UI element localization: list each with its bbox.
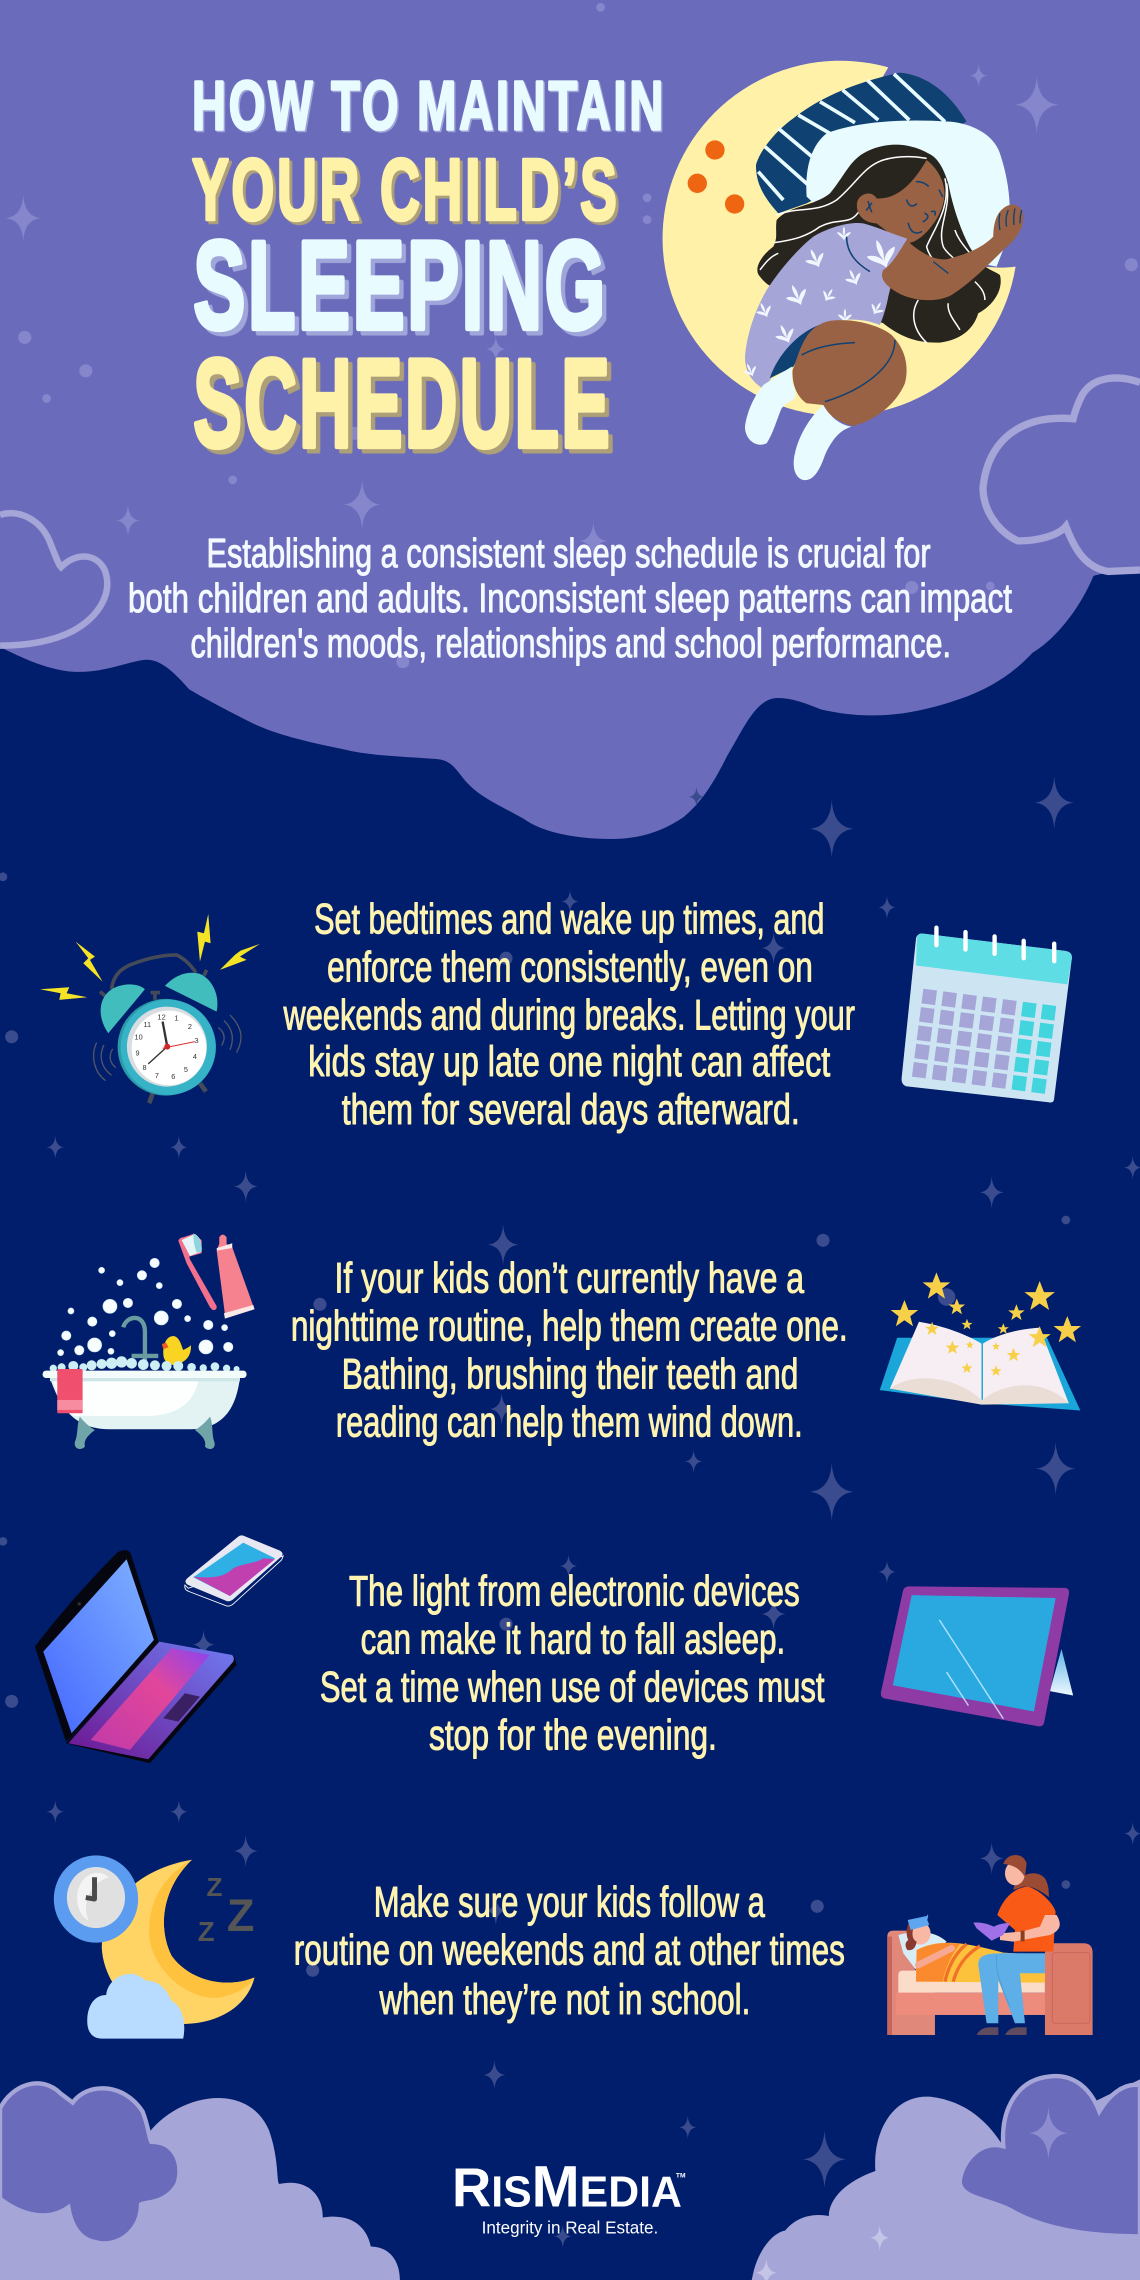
- clock hands: [163, 1022, 167, 1047]
- toothbrush: [178, 1234, 217, 1310]
- clock numerals: 7: [155, 1071, 159, 1080]
- toothpaste: [217, 1235, 253, 1314]
- clock handle and stubs: [100, 955, 207, 1000]
- logo: RISMedia: TM: [676, 2172, 686, 2179]
- icon: tablet: [881, 1586, 1073, 1726]
- cloud: bottom left: [0, 2083, 400, 2280]
- icon: alarm clock: [40, 914, 260, 1103]
- shoes: [977, 2027, 1027, 2035]
- laptop screen: [35, 1550, 159, 1742]
- hair: [757, 145, 1001, 343]
- clock numerals: 2: [188, 1022, 192, 1031]
- icon: moon with clock and zzz: [54, 1855, 254, 2039]
- icon: calendar: [902, 928, 1072, 1102]
- title line: your child's: YOUR CHILD’S: [192, 142, 619, 239]
- stars above the book: [891, 1272, 1081, 1376]
- step 3 text: [320, 1567, 825, 1758]
- panel: purple header cloud: [0, 0, 1140, 839]
- blanket: [916, 1943, 1045, 1983]
- hair highlights: [760, 157, 985, 343]
- clock numerals: 5: [184, 1065, 188, 1074]
- dark cloud with outline: [960, 2076, 1140, 2236]
- title: [192, 66, 666, 473]
- dress: [745, 223, 907, 390]
- zzz: [198, 1872, 254, 1947]
- icon: open book with stars: [880, 1272, 1081, 1410]
- clock numerals: 8: [143, 1063, 147, 1072]
- cloud: bottom right: [752, 2076, 1140, 2280]
- thigh: [792, 320, 907, 426]
- step 1 text: kids stay up late one night can affect: [308, 1038, 830, 1085]
- cloud outline: left: [0, 513, 107, 646]
- title line: how to maintain: HOW TO MAINTAIN: [192, 66, 666, 144]
- intro text: Establishing a consistent sleep schedule is crucial for: [206, 530, 931, 576]
- tub: [50, 1378, 240, 1429]
- vibration lines: [94, 1015, 241, 1081]
- faucet: [123, 1318, 158, 1362]
- cloud outline: top right: [983, 378, 1140, 571]
- step 1 text: weekends and during breaks. Letting your: [283, 991, 855, 1038]
- step 2 text: reading can help them wind down.: [336, 1399, 803, 1446]
- icon: parent reading to child in bed: [887, 1855, 1093, 2035]
- bells: [101, 984, 145, 1033]
- armrest: [1045, 1943, 1093, 2035]
- step 3 text: The light from electronic devices: [349, 1567, 800, 1614]
- duck: [162, 1336, 191, 1365]
- headboard and leg: [887, 1931, 935, 2035]
- white pillow: [806, 120, 1010, 267]
- moon: [102, 1860, 254, 2024]
- clock numerals: 9: [136, 1049, 140, 1058]
- parent back hair: [1013, 1873, 1049, 1897]
- step 2 text: nighttime routine, help them create one.: [291, 1303, 848, 1350]
- step 1 text: them for several days afterward.: [342, 1086, 800, 1133]
- foam: [50, 1356, 240, 1372]
- light cloud: [0, 2098, 400, 2280]
- clock numerals: 6: [171, 1072, 175, 1081]
- clock numerals: 12: [158, 1013, 166, 1022]
- towel: [57, 1369, 83, 1413]
- step 4 text: when they’re not in school.: [379, 1976, 750, 2023]
- illustration: girl sleeping on the moon: [663, 61, 1023, 480]
- parent legs: [978, 1953, 1045, 2023]
- step 3 text: stop for the evening.: [429, 1711, 717, 1758]
- book: [973, 1922, 1010, 1941]
- striped pillow: [756, 73, 967, 213]
- decorative stars and dots on purple: [6, 3, 1138, 668]
- clock numerals: 4: [193, 1052, 197, 1061]
- icon: bathtub with duck and toothbrush: [43, 1233, 255, 1449]
- clock numerals: 10: [135, 1033, 143, 1042]
- step 3 text: can make it hard to fall asleep.: [361, 1615, 785, 1662]
- clock: [54, 1855, 138, 1943]
- zzz: Z: [198, 1916, 215, 1947]
- step 1 text: Set bedtimes and wake up times, and: [314, 896, 824, 943]
- zzz: Z: [227, 1890, 254, 1941]
- logo: RISMedia: RISMEDIA: [452, 2155, 682, 2220]
- socks: [745, 367, 796, 445]
- decorative stars and dots on navy: [0, 776, 1140, 2248]
- clock numerals: [135, 1013, 199, 1081]
- clock body: [118, 999, 214, 1096]
- step 4 text: Make sure your kids follow a: [374, 1878, 765, 1925]
- light cloud: [752, 2079, 1140, 2280]
- touchpad: [163, 1693, 200, 1722]
- tub feet: [75, 1417, 215, 1449]
- step 4 text: [294, 1878, 845, 2023]
- bed base: [896, 1993, 1046, 2015]
- step 1 text: enforce them consistently, even on: [327, 944, 813, 991]
- parent torso: [997, 1887, 1056, 1952]
- clock numerals: 1: [175, 1014, 179, 1023]
- intro text: [128, 530, 1013, 666]
- step 2 text: [291, 1255, 848, 1446]
- cloud: [87, 1974, 184, 2039]
- laptop base: [66, 1642, 237, 1763]
- face: [857, 160, 945, 243]
- bubbles: [58, 1258, 233, 1356]
- step 1 text: [283, 896, 855, 1133]
- keyboard: [91, 1648, 210, 1750]
- lightning bolts: [40, 914, 260, 1000]
- mattress: [898, 1971, 1045, 1993]
- dress flowers: [741, 226, 901, 379]
- step 2 text: Bathing, brushing their teeth and: [342, 1351, 798, 1398]
- arm and hand: [882, 205, 1023, 300]
- logo: RISMedia: Integrity in Real Estate.: [482, 2217, 658, 2237]
- zzz: Z: [206, 1872, 222, 1902]
- icon: laptop: [35, 1550, 237, 1763]
- title line: sleeping: SLEEPING: [193, 217, 608, 356]
- feet: [149, 1083, 206, 1103]
- step 2 text: If your kids don’t currently have a: [334, 1255, 805, 1302]
- step 4 text: routine on weekends and at other times: [294, 1926, 845, 1973]
- crescent moon: [663, 61, 1016, 416]
- clock numerals: 11: [143, 1020, 151, 1029]
- title line: schedule: SCHEDULE: [193, 334, 612, 473]
- dark cloud with outline: [0, 2083, 179, 2243]
- child: [906, 1914, 952, 1965]
- clock numerals: 3: [195, 1036, 199, 1045]
- icon: smartphone: [185, 1535, 283, 1606]
- pillow: [898, 1932, 947, 1971]
- shorts: [770, 322, 832, 378]
- parent arm: [1000, 1915, 1060, 1942]
- parent head: [1005, 1861, 1025, 1885]
- step 3 text: Set a time when use of devices must: [320, 1663, 825, 1710]
